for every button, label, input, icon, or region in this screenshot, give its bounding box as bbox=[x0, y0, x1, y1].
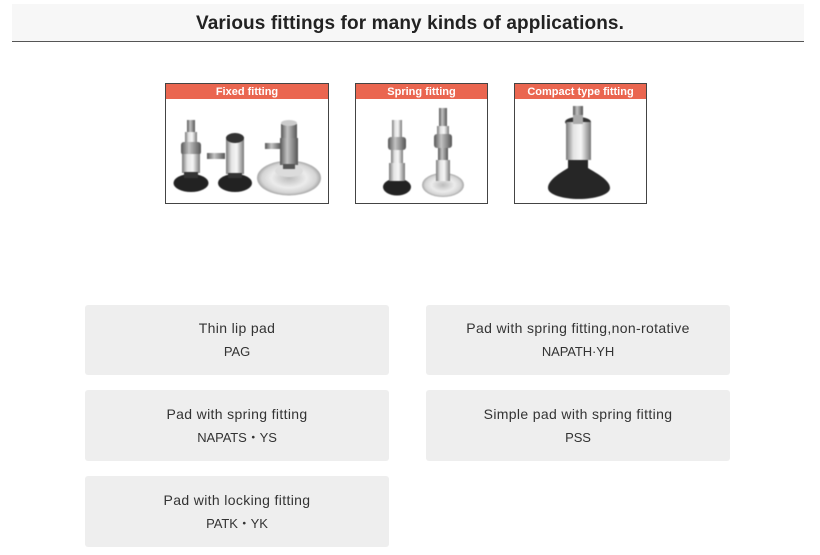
pad 2 bbox=[207, 133, 252, 192]
card: Simple pad with spring fitting: PSS bbox=[565, 430, 591, 445]
panel: fixed fitting bbox=[165, 83, 329, 204]
card: Pad with locking fitting: PATK・YK bbox=[206, 516, 268, 531]
card: Pad with locking fitting bbox=[85, 476, 389, 547]
card: Pad with spring fitting: NAPATS・YS bbox=[197, 430, 277, 445]
card: Pad with spring fitting, non-rotative bbox=[426, 305, 730, 375]
card: Pad with spring fitting bbox=[85, 390, 389, 461]
photo: two spring fitting pads bbox=[382, 107, 464, 198]
title bbox=[12, 4, 804, 42]
card: Thin lip pad bbox=[85, 305, 389, 375]
card: Thin lip pad: Thin lip pad bbox=[199, 320, 275, 336]
panel: spring fitting bbox=[355, 83, 488, 204]
photo: three fixed fitting pads bbox=[172, 119, 322, 196]
card: Simple pad with spring fitting bbox=[426, 390, 730, 461]
card: Pad with spring fitting: Pad with spring fitting bbox=[166, 406, 308, 422]
label: spring fitting: Spring fitting bbox=[387, 86, 456, 98]
label: fixed fitting: Fixed fitting bbox=[216, 86, 278, 98]
panel: compact type fitting bbox=[514, 83, 647, 204]
card: Pad with spring fitting, non-rotative: Pad with spring fitting,non-rotative bbox=[466, 320, 690, 336]
pad 3 bbox=[257, 120, 321, 196]
pad 2 bbox=[422, 108, 464, 197]
label: spring fitting bbox=[356, 84, 487, 99]
label: compact type fitting bbox=[515, 84, 646, 99]
card: Pad with locking fitting: Pad with locking fitting bbox=[164, 492, 310, 508]
label: fixed fitting bbox=[166, 84, 328, 99]
pad 1 bbox=[383, 120, 411, 196]
title: Various fittings for many kinds of applications. bbox=[196, 13, 624, 34]
card: Thin lip pad: PAG bbox=[224, 344, 250, 359]
pad 1 bbox=[174, 120, 208, 192]
card: Pad with spring fitting, non-rotative: NAPATH·YH bbox=[542, 344, 614, 359]
label: compact type fitting: Compact type fitting bbox=[527, 86, 634, 98]
card: Simple pad with spring fitting: Simple pad with spring fitting bbox=[484, 406, 672, 422]
photo: compact fitting pad bbox=[547, 105, 611, 200]
